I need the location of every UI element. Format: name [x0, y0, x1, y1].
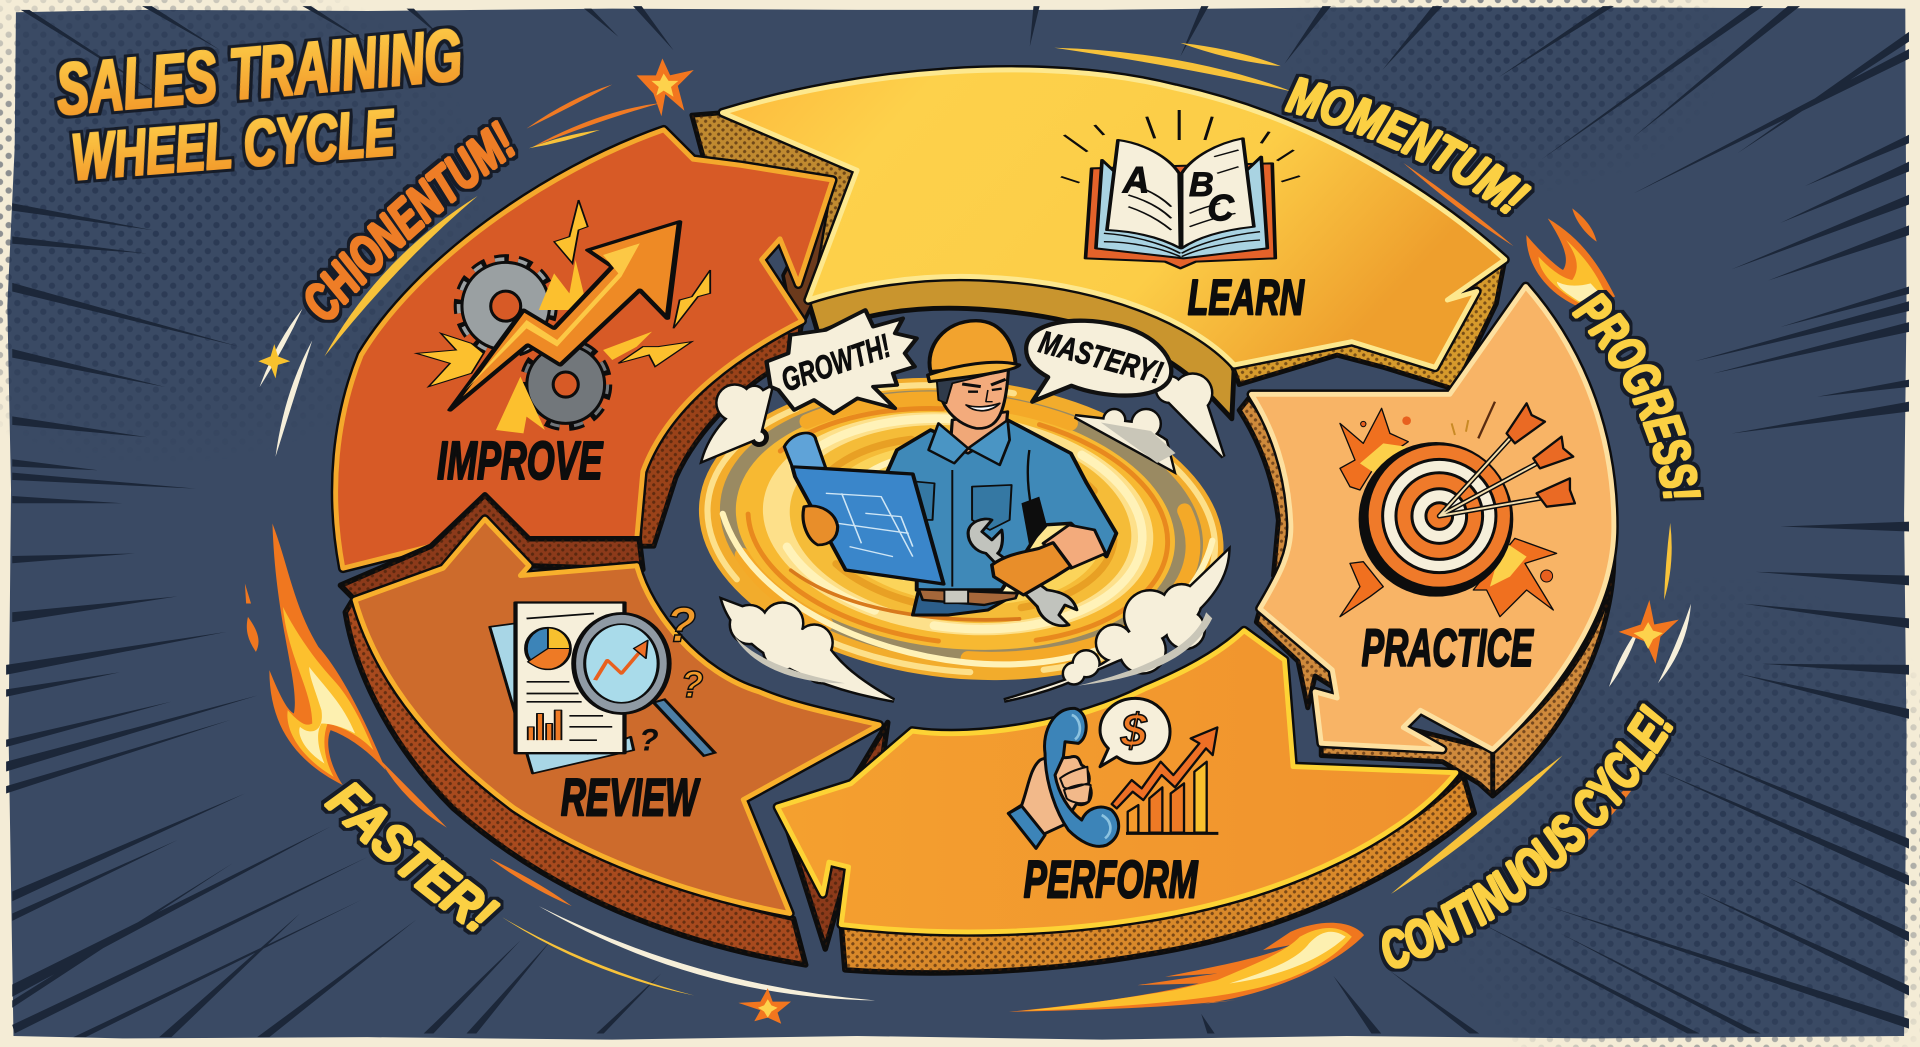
flame: upper right — [1526, 208, 1615, 307]
callout: faster: FASTER! — [321, 779, 504, 935]
icon: gears and zigzag arrow — [416, 200, 710, 433]
clouds — [703, 375, 1228, 700]
pie chart — [526, 628, 570, 669]
flame: lower left — [245, 524, 386, 785]
icon: open book — [1061, 110, 1300, 268]
cloud: bottom right — [1004, 551, 1228, 700]
zigzag growth arrow — [450, 222, 680, 410]
explosion behind arrow — [416, 200, 710, 433]
spark star: left — [258, 344, 290, 378]
spark star: right — [1619, 600, 1679, 664]
left glove — [803, 506, 838, 545]
wheel: five arrow segments — [336, 70, 1614, 973]
panel: learn extrusion bands — [692, 113, 1505, 419]
icon: open book: C — [1207, 187, 1234, 228]
telephone handset — [1045, 708, 1119, 846]
panel: practice face — [1251, 287, 1614, 749]
gears — [463, 263, 604, 422]
spark star: top — [638, 60, 692, 114]
icon: phone and rising chart — [1008, 698, 1218, 848]
neck — [950, 412, 1008, 453]
wrench — [968, 519, 1077, 626]
hand — [1008, 757, 1091, 835]
title line 2: WHEEL CYCLE — [69, 96, 398, 195]
hard hat — [930, 321, 1016, 372]
head — [939, 370, 1008, 428]
callout: progress: PROGRESS! — [1568, 290, 1704, 502]
central swirl vortex — [684, 353, 1239, 705]
speech bubble: mastery: MASTERY! — [1035, 323, 1167, 391]
sales chart bars — [1126, 762, 1218, 833]
forearm — [1043, 525, 1106, 568]
panel: review face — [355, 519, 879, 914]
icon: report and magnifier: ? — [681, 664, 703, 705]
bar chart — [528, 710, 561, 740]
target rings — [1359, 442, 1513, 597]
spark star: bottom — [738, 988, 791, 1024]
right glove — [992, 543, 1071, 595]
title — [53, 13, 465, 195]
icon: report and magnifier — [490, 599, 710, 773]
callout: chionentum: CHIONENTUM! — [302, 117, 518, 323]
label: improve: IMPROVE — [437, 431, 604, 491]
cloud: bottom left — [722, 600, 894, 700]
callout: momentum: MOMENTUM! — [1282, 74, 1535, 217]
icon: open book: B — [1189, 166, 1214, 204]
speech bubble dollar — [1100, 698, 1170, 767]
belt — [919, 589, 1018, 605]
icon: open book: A — [1122, 159, 1149, 200]
panel: perform face — [778, 631, 1456, 932]
rising trend arrow — [1112, 727, 1217, 808]
explosion bursts — [1340, 408, 1557, 617]
label: perform: PERFORM — [1024, 851, 1198, 910]
label: practice: PRACTICE — [1362, 619, 1534, 678]
panel: practice extrusion bands — [1239, 398, 1614, 796]
label: review: REVIEW — [561, 769, 701, 828]
collar — [929, 420, 1010, 465]
arrows — [1439, 418, 1568, 516]
blueprint — [792, 467, 944, 584]
shirt — [885, 420, 1116, 590]
panel: improve inner band — [639, 321, 802, 546]
magnifier handle — [658, 700, 710, 755]
panel: review top chevron band — [340, 495, 643, 600]
document lines — [527, 613, 612, 740]
panel: review outer bands — [345, 600, 888, 965]
panel: perform extrusion band — [841, 775, 1474, 973]
character: construction worker — [784, 321, 1116, 626]
cloud: top left — [703, 386, 771, 460]
icon: report and magnifier: ? — [639, 722, 659, 758]
panel: improve face — [336, 130, 833, 568]
question marks: ? — [666, 599, 696, 653]
motion streaks and sparks — [258, 43, 1691, 1024]
speech burst: growth: GROWTH! — [777, 328, 895, 399]
icon: target with arrows — [1340, 402, 1575, 617]
callout: continuous cycle: CONTINUOUS CYCLE! — [1379, 700, 1676, 972]
label: learn: LEARN — [1188, 270, 1305, 326]
magnifier lens — [574, 613, 669, 713]
panel: learn face — [722, 70, 1505, 367]
trousers — [913, 590, 1018, 615]
fingers — [1060, 767, 1091, 803]
icon: phone and rising chart: $ — [1120, 704, 1148, 756]
flame: bottom right — [1009, 923, 1364, 1012]
cloud: top right — [1075, 375, 1223, 470]
speech burst: growth — [767, 310, 917, 413]
shirt cuff — [1008, 806, 1045, 848]
